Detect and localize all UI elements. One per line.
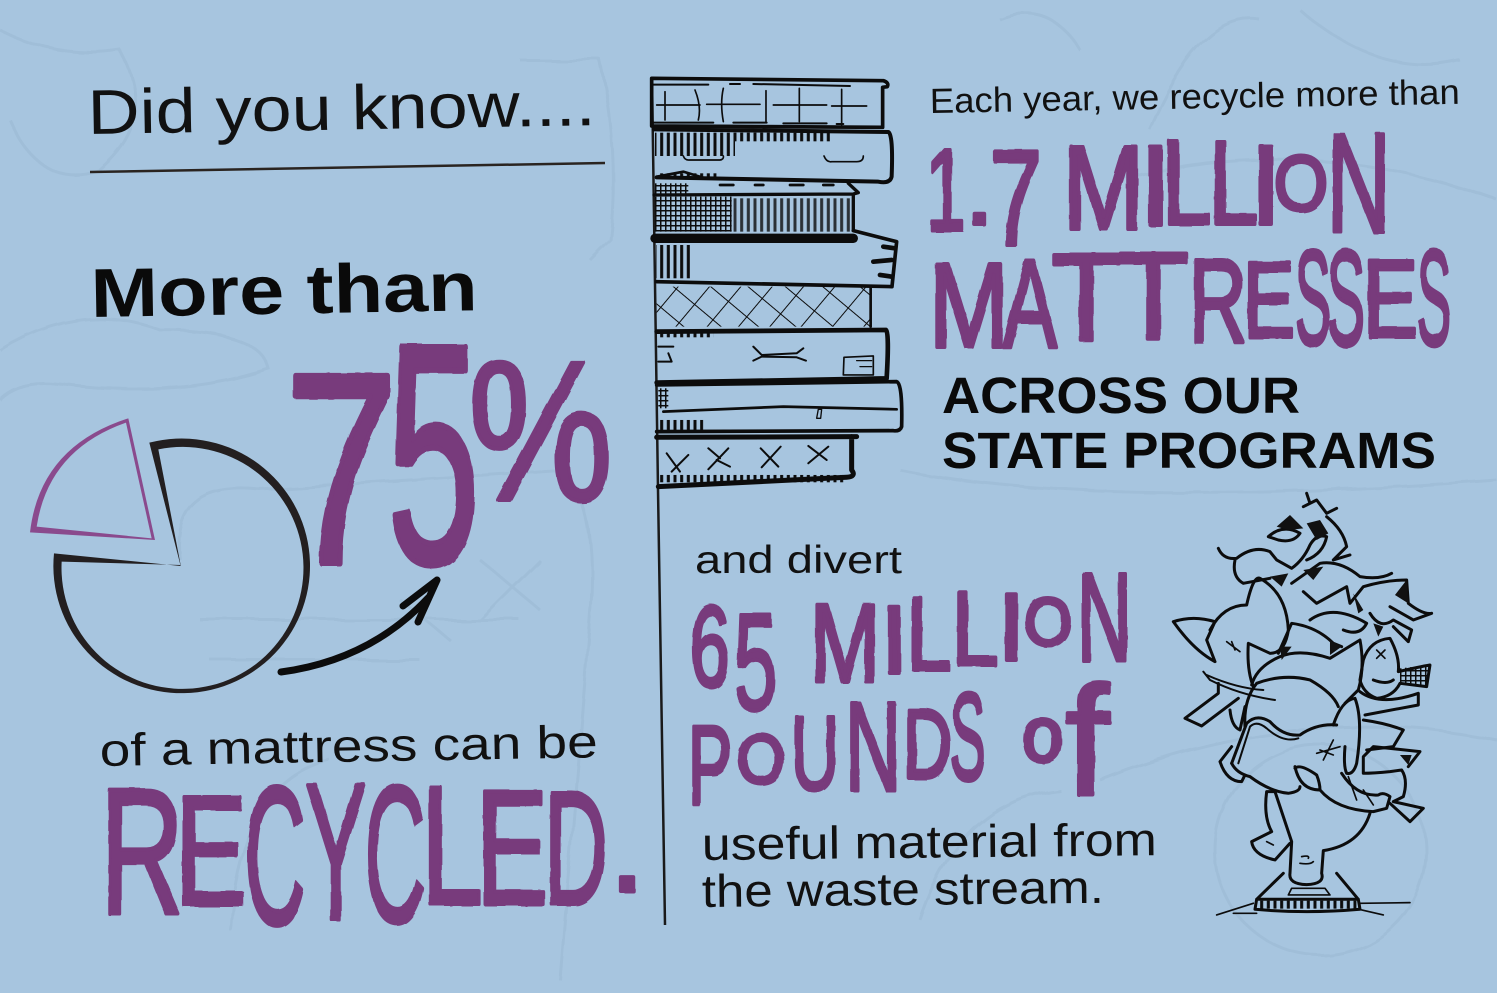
stat: 75%: 7 [285, 317, 398, 621]
text: across our state programs: STATE PROGRAMS [942, 422, 1436, 479]
text: of a mattress can be: of a mattress can be [99, 715, 598, 776]
mattress 3 [654, 183, 858, 238]
stat: 65 million pounds of: o [1022, 692, 1063, 778]
stat: 65 million pounds of: N [1077, 547, 1132, 688]
stat: 1.7 million mattresses: T [1118, 228, 1189, 366]
text: more than: More than [90, 248, 478, 332]
stat: 65 million pounds of: f [1065, 655, 1110, 829]
stat: 1.7 million mattresses: I [1250, 122, 1281, 248]
upper elephants [1218, 536, 1327, 583]
heading: recycled: C [244, 746, 306, 966]
heading: recycled: E [476, 756, 548, 939]
mattress 4 [656, 231, 897, 287]
stat: 1.7 million mattresses: E [1363, 238, 1418, 361]
stat: 65 million pounds of: I [998, 574, 1025, 681]
stat: 1.7 million mattresses: M [1063, 121, 1144, 255]
stat: 1.7 million mattresses: N [1327, 104, 1391, 263]
stat: 1.7 million mattresses: 1 [926, 125, 966, 255]
heading: recycled: L [421, 751, 483, 941]
stat: 1.7 million mattresses: E [1243, 239, 1295, 360]
stat: 1.7 million mattresses: I [1140, 123, 1171, 249]
text: useful material: useful material from [702, 813, 1157, 870]
stat: 1.7 million mattresses: R [1189, 234, 1247, 368]
mattress 1 [652, 78, 888, 127]
pie slice: purple [30, 418, 155, 540]
middle elephants [1245, 677, 1338, 727]
stat: 1.7 million mattresses: . [965, 134, 993, 246]
stat: 65 million pounds of: I [881, 587, 908, 694]
heading: recycled: . [609, 773, 645, 919]
stat: 1.7 million mattresses: M [929, 239, 1009, 373]
stat: 1.7 million mattresses: A [1003, 235, 1057, 374]
mattress 2 [654, 129, 892, 182]
shaded patches [1270, 515, 1412, 765]
stat: 65 million pounds of: O [737, 721, 785, 798]
stat: 1.7 million mattresses: S [1327, 222, 1365, 374]
stat: 65 million pounds of: M [810, 581, 880, 706]
text: across our state programs: ACROSS OUR [942, 367, 1300, 424]
pie chart with 25% slice removed [30, 418, 310, 693]
scale [1255, 873, 1360, 912]
text: and divert: and divert [695, 539, 902, 582]
stat: 75%: 5 [387, 279, 480, 630]
heading: recycled: R [100, 752, 184, 953]
stat: 65 million pounds of: L [907, 576, 951, 693]
illustration: elephants stacked on a scale [1173, 493, 1432, 915]
stat: 1.7 million mattresses: T [1051, 229, 1122, 367]
stat: 65 million pounds of: P [688, 703, 732, 828]
stat: 65 million pounds of: D [903, 689, 952, 799]
illustration: stack of mattresses [652, 78, 902, 487]
mattress 6 [657, 330, 888, 383]
heading: did you know: Did you know.... [87, 69, 596, 148]
stat: 65 million pounds of: 5 [734, 586, 777, 740]
heading: did you know [87, 69, 605, 172]
heading: recycled: Y [305, 743, 367, 962]
stat: 65 million pounds of: S [950, 668, 986, 807]
stat: 1.7 million mattresses: S [1295, 222, 1331, 374]
mattress 7 [657, 382, 902, 432]
stat: 65 million pounds of: 6 [690, 584, 730, 711]
stat: 1.7 million mattresses [926, 104, 1451, 374]
stat: 65 million pounds of: L [952, 571, 998, 688]
stat: 1.7 million mattresses: L [1162, 116, 1212, 250]
stat: 65 million pounds of: N [845, 676, 901, 817]
heading: recycled: D [544, 758, 608, 939]
stat: 1.7 million mattresses: O [1274, 139, 1328, 227]
stat: 75%: % [468, 320, 613, 543]
stat: 1.7 million mattresses: 7 [990, 122, 1042, 274]
stat: 65 million pounds of: O [1024, 585, 1072, 660]
stat: 65 million pounds of [688, 547, 1132, 829]
bottom elephant [1232, 718, 1337, 763]
stat: 1.7 million mattresses: L [1209, 116, 1258, 250]
arrow from pie to 75% [281, 580, 437, 672]
text: useful material [702, 813, 1157, 917]
stat: 65 million pounds of: U [791, 695, 839, 813]
text: across our state programs [942, 367, 1436, 479]
mattress 8 [657, 437, 857, 487]
divider line [652, 78, 665, 925]
heading: recycled: C [364, 745, 426, 964]
heading: recycled: E [175, 764, 247, 939]
text: each year: Each year, we recycle more than [929, 73, 1460, 121]
text: useful material: the waste stream. [702, 861, 1104, 917]
mattress 5: crosshatch [657, 287, 871, 327]
